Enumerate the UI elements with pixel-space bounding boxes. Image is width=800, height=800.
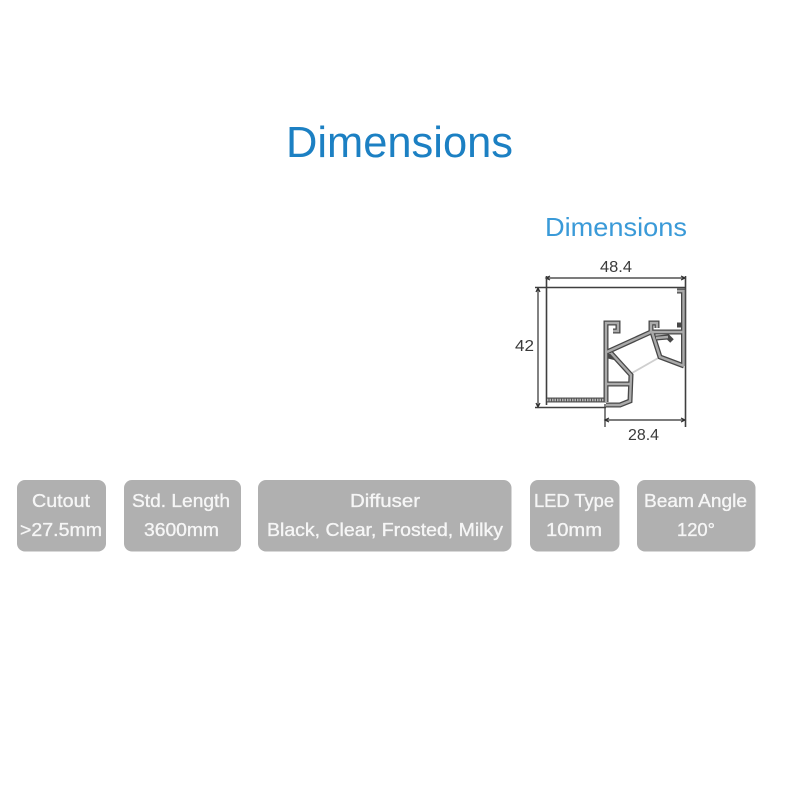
aluminium profile dark outline: [606, 291, 684, 405]
panel: dimensions diagram: [515, 212, 687, 444]
spec pill: diffuser: Diffuser: [350, 490, 420, 511]
spec pill: cutout: [17, 480, 106, 552]
extents outline: [535, 276, 686, 427]
spec pill: cutout: >27.5mm: [20, 519, 102, 540]
diffuser: [632, 357, 660, 373]
spec pill: beam angle: 120°: [677, 519, 715, 540]
spec pill: beam angle: Beam Angle: [644, 490, 747, 511]
spec pill: standard length: [124, 480, 241, 552]
profile cross-section drawing: [535, 276, 686, 427]
spec pill: diffuser: [258, 480, 512, 552]
spec pill: LED type: [530, 480, 620, 552]
diagram heading: Dimensions: [545, 212, 687, 242]
dimension label: width 48.4: 48.4: [600, 259, 632, 276]
spec pill: standard length: 3600mm: [144, 519, 219, 540]
spec pill: cutout: Cutout: [32, 490, 90, 511]
spec pill: beam angle: [637, 480, 756, 552]
bottom lip: [547, 398, 606, 402]
dimension label: height 42: 42: [515, 338, 534, 355]
dimension line: depth 28.4: [605, 404, 685, 427]
spec pill: LED type: LED Type: [534, 490, 614, 511]
dimension line: height 42: [536, 288, 540, 407]
main title: Dimensions: [286, 119, 513, 167]
aluminium profile light fill: [606, 291, 684, 405]
dimension line: width 48.4: [546, 276, 685, 280]
spec pill: LED type: 10mm: [546, 519, 602, 540]
dimension label: depth 28.4: 28.4: [628, 427, 659, 444]
spec pill: diffuser: Black, Clear, Frosted, Milky: [267, 519, 504, 540]
spec pill: standard length: Std. Length: [132, 490, 230, 511]
